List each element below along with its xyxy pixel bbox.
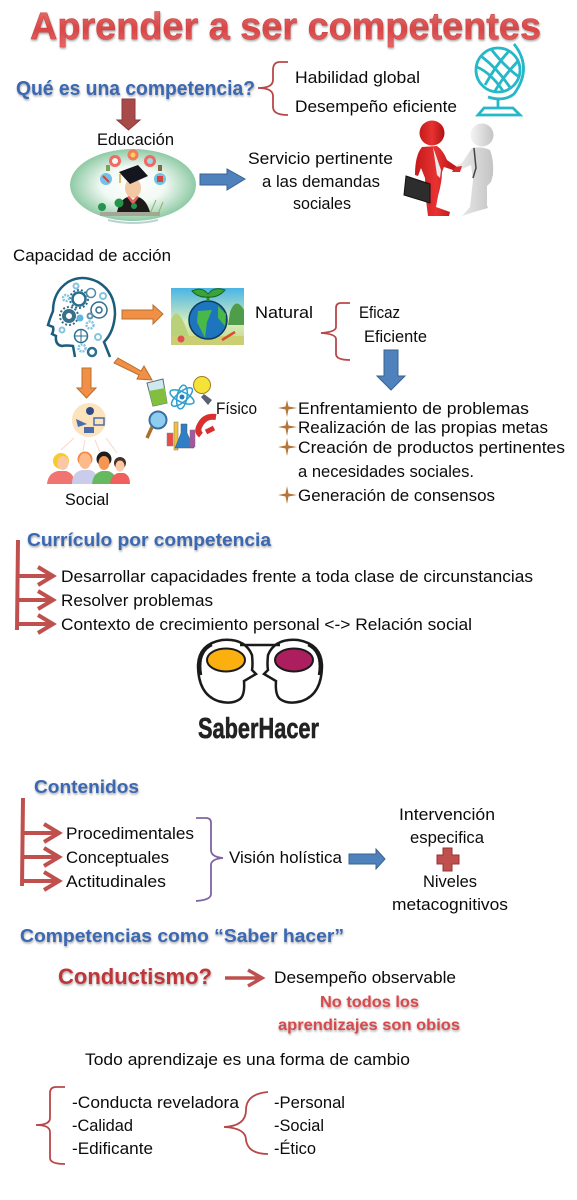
logo: saber hacer: SaberHacer	[198, 713, 319, 745]
icon: plus	[437, 848, 459, 871]
arrow: cabeza a físico	[114, 358, 152, 380]
text: natural: Natural	[255, 304, 313, 322]
text: sociales: sociales	[293, 195, 351, 213]
brace: contenidos	[196, 818, 223, 901]
brace: natural	[321, 303, 350, 360]
list: acciones: Creación de productos pertinentes	[298, 439, 565, 457]
icon: handshake figures	[404, 120, 494, 216]
heading: currículo por competencia: Currículo por competencia	[27, 530, 272, 550]
text: intervención específica: especifica	[410, 829, 485, 847]
list: acciones	[298, 400, 565, 505]
text: social: Social	[65, 491, 109, 509]
text: capacidad de acción: Capacidad de acción	[13, 247, 171, 265]
text: personal lista: -Ético	[274, 1139, 316, 1158]
text: a las demandas: a las demandas	[262, 173, 380, 191]
text: currículo puntos: Resolver problemas	[61, 592, 213, 610]
arrow: visión a intervención	[349, 849, 385, 869]
heading: qué es una competencia: Qué es una competencia?	[16, 78, 255, 100]
text: conducta lista: -Calidad	[72, 1117, 133, 1135]
title: Aprender a ser competentes	[30, 6, 541, 48]
brace: conducta	[36, 1087, 65, 1164]
text: tipos de contenidos: Actitudinales	[66, 873, 166, 891]
icon: education graduate	[70, 149, 196, 223]
list: acciones: a necesidades sociales.	[298, 463, 474, 481]
logo: saber hacer	[198, 640, 322, 745]
arrow: educación a servicio	[200, 169, 245, 190]
icon: bullet stars	[278, 400, 297, 504]
text: eficaz: Eficaz	[359, 304, 400, 322]
text: personal lista: -Personal	[274, 1094, 345, 1112]
arrows: currículo	[17, 540, 53, 633]
heading: contenidos: Contenidos	[34, 777, 139, 797]
text: tipos de contenidos: Procedimentales	[66, 825, 194, 843]
text: personal lista	[274, 1094, 345, 1158]
arrow: cabeza a social	[77, 368, 96, 398]
text: tipos de contenidos	[66, 825, 194, 891]
text: niveles metacognitivos	[392, 873, 508, 914]
text: desempeño observable: Desempeño observable	[274, 969, 456, 987]
text: habilidad global: Habilidad global	[295, 69, 420, 87]
text: conducta lista	[72, 1094, 240, 1158]
list: acciones: Enfrentamiento de problemas	[298, 400, 529, 418]
icon: globe	[476, 44, 524, 115]
callout: no todos los aprendizajes	[278, 994, 460, 1034]
text: educación: Educación	[97, 131, 174, 149]
list: acciones: Realización de las propias metas	[298, 419, 548, 437]
icon: plant and earth	[171, 288, 244, 345]
arrow: cabeza a natural	[122, 305, 163, 324]
arrows: contenidos	[22, 798, 59, 890]
text: eficiente: Eficiente	[364, 328, 427, 346]
text: currículo puntos: Contexto de crecimiento personal <-> Relación social	[61, 616, 472, 634]
text: servicio pertinente: Servicio pertinente	[248, 150, 393, 168]
icon: head with gears	[48, 278, 115, 357]
arrow: competencia a educación	[117, 99, 140, 130]
brace: competencia	[258, 62, 288, 115]
callout: no todos los aprendizajes: No todos los	[320, 994, 419, 1011]
text: visión holística: Visión holística	[229, 849, 343, 867]
text: currículo puntos	[61, 568, 533, 634]
brace: personal	[224, 1092, 268, 1154]
callout: no todos los aprendizajes: aprendizajes son obios	[278, 1017, 460, 1034]
heading: competencias como saber hacer: Competencias como “Saber hacer”	[20, 926, 344, 946]
arrow: natural a lista	[377, 350, 405, 390]
text: desempeño eficiente: Desempeño eficiente	[295, 98, 457, 116]
text: físico: Físico	[216, 400, 257, 418]
text: niveles metacognitivos: metacognitivos	[392, 896, 508, 914]
text: intervención específica: Intervención	[399, 806, 495, 824]
text: currículo puntos: Desarrollar capacidades frente a toda clase de circunstancias	[61, 568, 533, 586]
text: niveles metacognitivos: Niveles	[423, 873, 477, 891]
icon: social network	[47, 403, 130, 484]
text: personal lista: -Social	[274, 1117, 324, 1135]
arrow: conductismo a desempeño	[225, 970, 262, 986]
text: conducta lista: -Edificante	[72, 1140, 153, 1158]
icon: science objects	[147, 376, 216, 450]
text: todo aprendizaje: Todo aprendizaje es una forma de cambio	[85, 1051, 410, 1069]
text: tipos de contenidos: Conceptuales	[66, 849, 169, 867]
text: intervención específica	[399, 806, 495, 847]
list: acciones: Generación de consensos	[298, 487, 495, 505]
text: conducta lista: -Conducta reveladora	[72, 1094, 240, 1112]
heading: conductismo: Conductismo?	[58, 964, 212, 989]
